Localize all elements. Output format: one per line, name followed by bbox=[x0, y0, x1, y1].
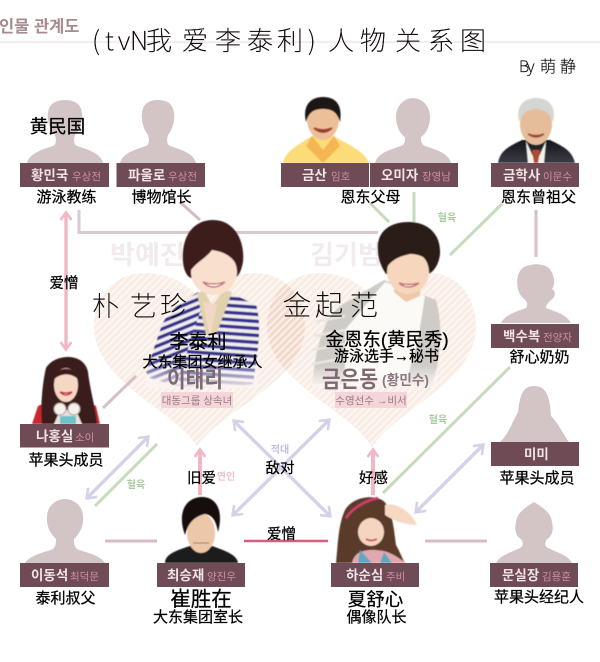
label: heroine Korean name: 이태리 bbox=[167, 366, 223, 392]
name plate: curator bbox=[116, 163, 205, 187]
connector: red love-hate line bbox=[244, 540, 328, 542]
name plate: manager: 김용훈 bbox=[542, 569, 571, 584]
label: hero Korean name bbox=[322, 366, 429, 392]
Chinese relation: love-hate bottom: 爱憎 bbox=[267, 525, 296, 543]
name plate: great-grandfather bbox=[491, 163, 579, 187]
name plate: manager bbox=[490, 563, 578, 587]
arrow: purple double arrow left bbox=[87, 437, 148, 498]
name plate: uncle bbox=[20, 563, 109, 587]
Chinese relation: hostile: 敌对 bbox=[266, 460, 294, 477]
photo: lead actress in striped top bbox=[146, 220, 259, 388]
Chinese label: group heiress: 大东集团女继承人 bbox=[142, 353, 263, 371]
Chinese label: great-grandfather: 恩东曾祖父 bbox=[501, 189, 576, 206]
Chinese label: apple-head member right: 苹果头成员 bbox=[499, 470, 575, 487]
photo: father in yellow hanbok bbox=[283, 97, 369, 163]
name plate: director: 양진우 bbox=[207, 569, 236, 584]
Chinese label: idol leader: 偶像队长 bbox=[346, 609, 407, 626]
arrow: purple double arrow right bbox=[416, 445, 483, 512]
silhouette: idol member bbox=[500, 386, 569, 442]
silhouette: mother bbox=[375, 98, 451, 163]
name plate: apple-head member: 나홍실 bbox=[36, 425, 73, 445]
byline: By萌静 bbox=[519, 53, 576, 77]
name plate: uncle: 이동석 bbox=[31, 564, 68, 584]
Chinese relation: love-hate left: 爱憎 bbox=[50, 274, 78, 292]
name plate: grandmother: 전양자 bbox=[543, 330, 572, 345]
connector: great-grandfather to grandmother bbox=[534, 210, 538, 257]
photo: great-grandfather in suit bbox=[498, 98, 575, 163]
Chinese label: curator: 博物馆长 bbox=[131, 189, 192, 206]
connector: family frame line bbox=[79, 210, 378, 232]
name plate: father: 금산 bbox=[302, 164, 327, 184]
name plate: grandmother: 백수복 bbox=[503, 325, 540, 345]
handwritten actress name: 朴艺珍 bbox=[92, 285, 187, 324]
Chinese label: uncle: 泰利叔父 bbox=[35, 590, 96, 607]
header: Korean section title: 인물 관계도 bbox=[0, 17, 79, 36]
relation label: blood relation left: 혈육 bbox=[127, 476, 145, 491]
silhouette: grandmother bbox=[501, 264, 571, 323]
name plate: father: 임호 bbox=[331, 169, 351, 184]
name plate: apple-head member bbox=[20, 424, 109, 448]
arrow: pink up arrow former lover bbox=[198, 450, 202, 495]
silhouette: manager bbox=[496, 502, 572, 563]
Chinese label: grandmother: 舒心奶奶 bbox=[509, 349, 570, 366]
handwritten actor name: 金起范 bbox=[283, 284, 378, 324]
connector: niece to heroine bbox=[103, 376, 136, 408]
arrow: pink double arrow left bbox=[64, 213, 68, 349]
name plate: idol leader bbox=[331, 563, 419, 587]
name plate: grandmother bbox=[491, 324, 579, 348]
name plate: mother bbox=[370, 163, 458, 187]
name plate: swim coach: 황민국 bbox=[31, 164, 68, 184]
Chinese label: apple-head member left: 苹果头成员 bbox=[28, 452, 104, 469]
Chinese label: Geum Eun-dong: 金恩东(黄民秀) bbox=[325, 329, 449, 350]
name plate: mother: 장영남 bbox=[422, 169, 451, 184]
relation label: hostility: 적대 bbox=[271, 441, 289, 456]
name plate: great-grandfather: 이문수 bbox=[543, 169, 572, 184]
name plate: swim coach: 우상전 bbox=[72, 169, 101, 184]
name plate: swim coach bbox=[20, 163, 109, 187]
photo: lead actor with grey cardigan bbox=[312, 222, 440, 387]
ghost names behind the leads bbox=[110, 240, 382, 270]
Chinese label: Lee Tae-ri: 李泰利 bbox=[169, 331, 227, 353]
label: hero role tag: 수영선수 →비서 bbox=[335, 395, 407, 407]
silhouette: uncle bbox=[25, 499, 105, 563]
connector: lower right line bbox=[425, 540, 487, 542]
Chinese label: Huang Minguo: 黄民国 bbox=[30, 116, 85, 137]
hearts: two overlapping striped hearts bbox=[94, 273, 476, 447]
connector: long green line bbox=[383, 367, 510, 493]
photo: idol leader with pink headband bbox=[336, 497, 417, 563]
label: heroine role tag: 대동그룹 상속녀 bbox=[162, 395, 232, 407]
name plate: uncle: 최덕문 bbox=[70, 569, 99, 584]
name plate: curator: 파울로 bbox=[128, 164, 165, 184]
name plate: great-grandfather: 금학사 bbox=[503, 164, 541, 184]
Chinese label: swim coach: 游泳教练 bbox=[36, 189, 97, 206]
name plate: manager: 문실장 bbox=[502, 564, 540, 584]
relation label: blood relation right: 혈육 bbox=[429, 411, 447, 426]
connector: parents green lines bbox=[370, 192, 502, 255]
arrow: pink up arrow affection bbox=[371, 450, 375, 495]
relation label: lover: 연인 bbox=[217, 468, 235, 483]
Chinese label: chief of group: 大东集团室长 bbox=[153, 609, 243, 626]
relation label: blood relation top: 혈육 bbox=[438, 209, 456, 224]
Chinese relation: old love: 旧爱 bbox=[187, 470, 216, 487]
arrows: purple crossed rivalry bbox=[233, 420, 330, 516]
ghost names behind the leads: 김기범 bbox=[310, 240, 382, 270]
Chinese label: swimmer to secretary: 游泳选手→秘书 bbox=[334, 348, 439, 365]
title: handwritten drama relationship chart: (tvN我爱李泰利)人物关系图 bbox=[92, 21, 486, 58]
name plate: director: 최승재 bbox=[167, 564, 204, 584]
ghost names behind the leads: 박예진 bbox=[110, 240, 185, 270]
Chinese label: Choi Seung-jae: 崔胜在 bbox=[170, 588, 232, 611]
name plate: Mimi: 미미 bbox=[524, 443, 549, 463]
name plate: apple-head member: 소이 bbox=[75, 430, 94, 445]
connector: lower left line bbox=[105, 540, 157, 542]
name plate: idol leader: 주비 bbox=[386, 569, 405, 584]
silhouette: museum curator bbox=[120, 100, 196, 163]
Chinese label: Xia Shuxin: 夏舒心 bbox=[348, 589, 403, 610]
name plate: Mimi bbox=[491, 442, 579, 466]
name plate: father bbox=[281, 163, 369, 187]
name plate: mother: 오미자 bbox=[381, 164, 419, 184]
Chinese label: apple-head manager: 苹果头经纪人 bbox=[494, 589, 584, 606]
name plate: curator: 우상전 bbox=[168, 169, 197, 184]
photo: man in black suit bbox=[165, 497, 238, 563]
connector: museum curator line bbox=[181, 203, 200, 220]
label: hero Korean name: 금은동 bbox=[322, 366, 378, 392]
connector: green line left bbox=[95, 444, 157, 506]
photo: apple-head member with headphones bbox=[32, 357, 100, 424]
name plate: idol leader: 하순심 bbox=[346, 564, 383, 584]
Chinese label: parents: 恩东父母 bbox=[340, 189, 401, 206]
Chinese relation: affection: 好感 bbox=[359, 470, 388, 487]
label: hero Korean name: (황민수) bbox=[382, 372, 429, 388]
silhouette: swim coach bbox=[27, 100, 103, 163]
name plate: director bbox=[157, 563, 245, 587]
